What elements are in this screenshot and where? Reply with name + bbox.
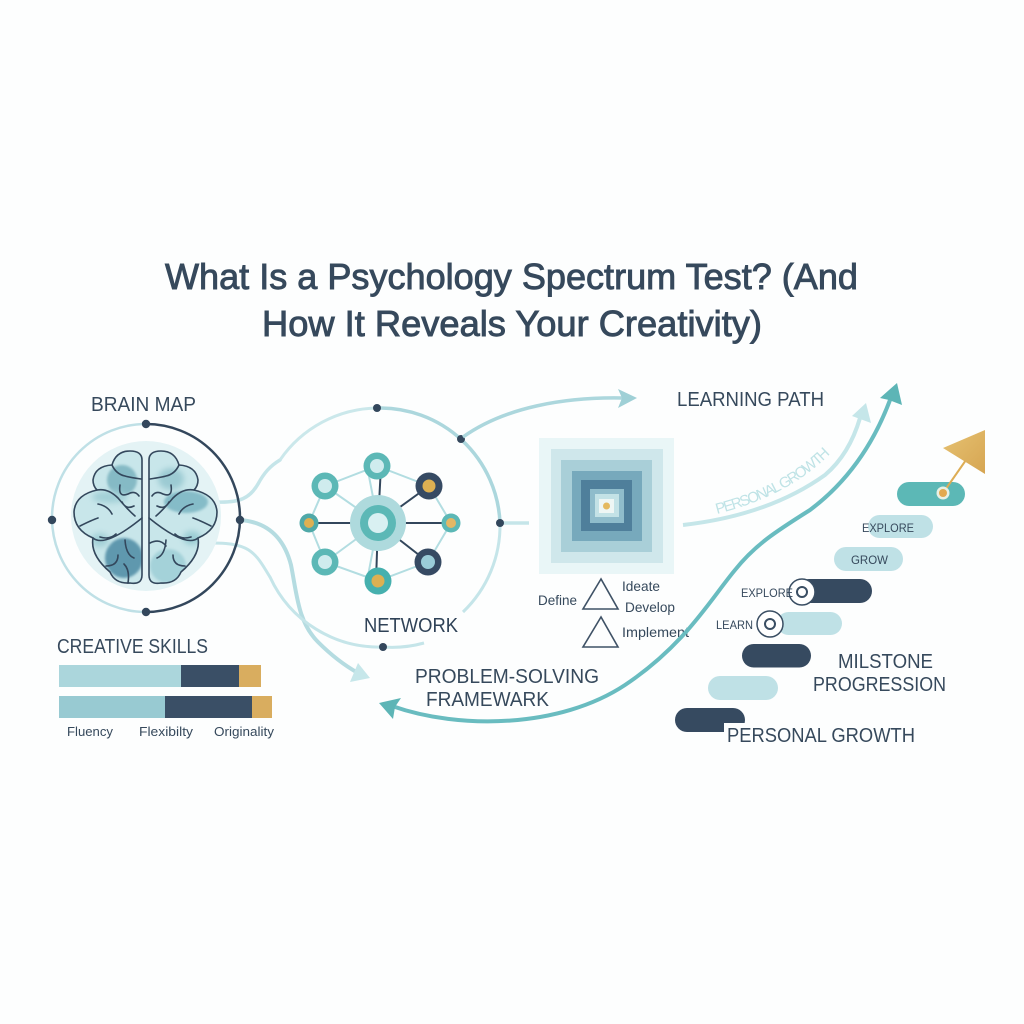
heading: personal growth: PERSONAL GROWTH <box>727 725 915 747</box>
title <box>165 256 858 344</box>
heading: milestone progression <box>813 651 946 696</box>
step: dark pill <box>742 644 811 668</box>
top milestone with flag <box>897 430 985 506</box>
ring nodes <box>48 420 244 616</box>
step: learn: LEARN <box>716 618 753 632</box>
outer ring <box>52 424 240 612</box>
bar labels: Originality <box>214 724 275 739</box>
central node <box>350 495 406 551</box>
heading: brain map: BRAIN MAP <box>91 394 196 416</box>
step: grow: GROW <box>851 553 889 567</box>
ring nodes <box>373 404 504 651</box>
title: What Is a Psychology Spectrum Test? (And <box>165 256 858 297</box>
network nodes <box>300 452 460 594</box>
arrow: personal growth curve <box>682 403 871 527</box>
heading: problem-solving framework <box>415 666 599 711</box>
step: explore lower: EXPLORE <box>741 586 793 600</box>
heading: milestone progression: PROGRESSION <box>813 674 946 696</box>
step labels: Ideate <box>622 578 660 594</box>
icon: triangle lower <box>583 617 618 647</box>
heading: problem-solving framework: PROBLEM-SOLVING <box>415 666 599 688</box>
panel: network <box>270 404 529 651</box>
title: How It Reveals Your Creativity) <box>262 303 762 344</box>
step: learn <box>716 611 842 637</box>
personal growth curve label <box>717 452 832 514</box>
panel: framework steps <box>538 578 689 647</box>
arrow: personal growth curve: PERSONAL GROWTH <box>716 447 830 514</box>
brain halo <box>71 441 221 591</box>
bar labels <box>67 724 275 739</box>
step: light pill <box>708 676 778 700</box>
arrow: pale arrow into problem-solving framework <box>350 663 370 682</box>
infographic canvas <box>48 262 985 742</box>
heading: creative skills: CREATIVE SKILLS <box>57 636 208 658</box>
step labels: Develop <box>625 599 675 615</box>
network links <box>309 466 451 581</box>
heading: problem-solving framework: FRAMEWARK <box>426 689 550 711</box>
bar labels: Fluency <box>67 724 113 739</box>
arrow: network to learning path <box>463 389 637 437</box>
heading: network: NETWORK <box>364 615 459 637</box>
heading: milestone progression: MILSTONE <box>838 651 933 673</box>
step: grow <box>834 547 903 571</box>
icon: triangle upper <box>583 579 618 609</box>
network ring <box>270 408 500 647</box>
heading: learning path: LEARNING PATH <box>677 389 824 411</box>
connector curves: brain to network <box>195 460 358 673</box>
arrow: main growth curve <box>379 383 902 721</box>
panel: brain map <box>48 394 244 616</box>
panel: milestone steps <box>675 430 985 732</box>
step: explore upper: EXPLORE <box>862 521 914 535</box>
panel: creative skills <box>57 636 275 739</box>
step: explore lower <box>741 579 872 605</box>
panel: concentric squares <box>539 438 674 574</box>
icon: brain <box>74 451 217 583</box>
step labels: Define <box>538 592 577 608</box>
step labels <box>538 578 689 640</box>
bar labels: Flexibilty <box>139 724 194 739</box>
stacked bar chart <box>59 665 272 718</box>
step labels: Implement <box>622 624 689 640</box>
step: explore upper <box>862 515 933 538</box>
step: dark base pill <box>675 708 745 732</box>
connector: network to framework square <box>500 521 529 525</box>
